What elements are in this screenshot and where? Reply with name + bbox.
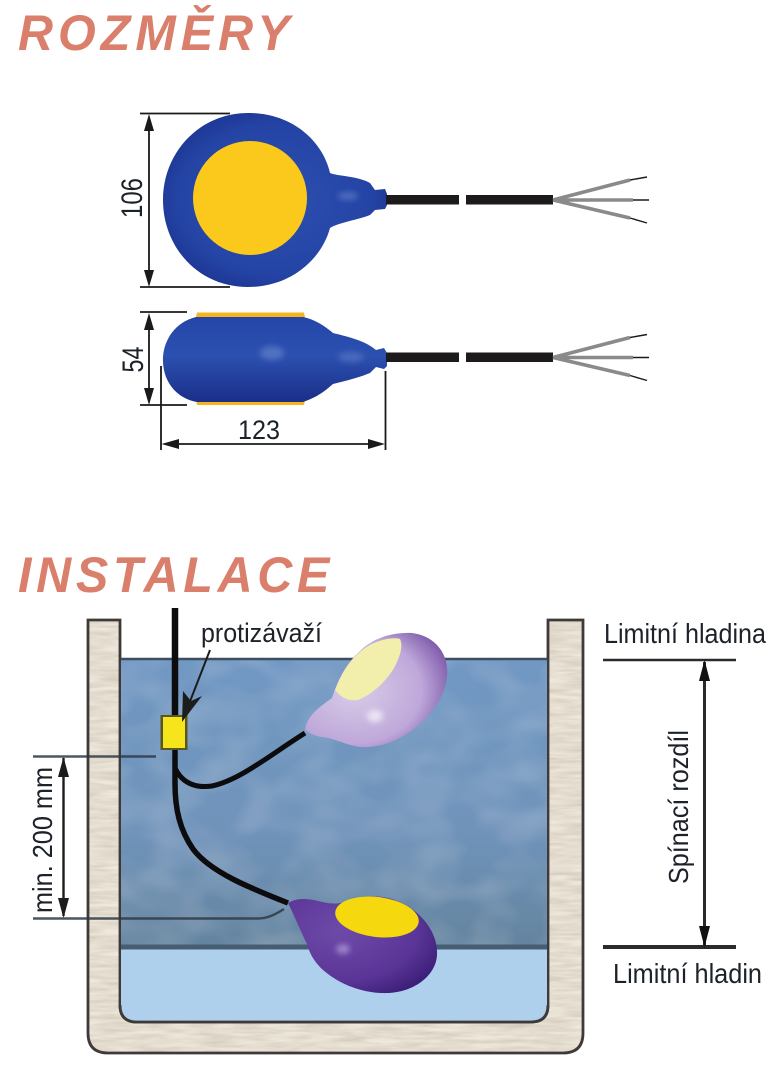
title: ROZMĚRY: ROZMĚRY — [18, 4, 294, 61]
neck highlight — [338, 352, 364, 362]
dimension: 123: 123 — [238, 415, 280, 445]
upper water body — [121, 660, 547, 947]
pale yellow cap — [335, 638, 401, 700]
dimension: 106 — [116, 114, 230, 287]
yellow cap edges — [195, 312, 306, 405]
yellow cap — [193, 141, 307, 255]
dimension: 54 — [117, 312, 187, 405]
body highlight — [260, 346, 284, 360]
dimension: 54: 54 — [117, 346, 150, 372]
float body, side view — [163, 317, 387, 402]
top-view float switch — [163, 113, 387, 287]
yellow cap — [333, 892, 421, 942]
float highlight — [367, 710, 383, 722]
dimension: min. 200 mm: min. 200 mm — [27, 767, 58, 913]
dimension: Spínací rozdíl: Spínací rozdíl — [663, 730, 694, 884]
side-view float switch — [163, 312, 387, 405]
dimension: min. 200 mm — [27, 756, 284, 918]
float highlight — [336, 944, 350, 954]
label: Limitní hladin: Limitní hladin — [613, 958, 762, 989]
dimension: Spínací rozdíl — [603, 660, 736, 947]
neck highlight — [338, 192, 358, 200]
label: Limitní hladina: Limitní hladina — [604, 618, 766, 649]
dimension: 123 — [161, 366, 386, 450]
counterweight label: protizávaží: protizávaží — [201, 618, 322, 648]
tank wall — [88, 620, 583, 1053]
lower light water — [121, 948, 547, 1021]
side-view cable and wires — [386, 334, 649, 380]
installation tank — [88, 620, 583, 1053]
upper float, lilac — [305, 633, 447, 747]
top-view cable and wires — [386, 177, 649, 223]
cables — [175, 608, 305, 903]
arrow to counterweight — [182, 650, 210, 722]
title: INSTALACE: INSTALACE — [18, 547, 331, 603]
float body, top view — [163, 113, 387, 287]
lower float, violet — [288, 892, 437, 993]
counterweight — [160, 715, 188, 750]
dimension: 106: 106 — [116, 178, 149, 218]
